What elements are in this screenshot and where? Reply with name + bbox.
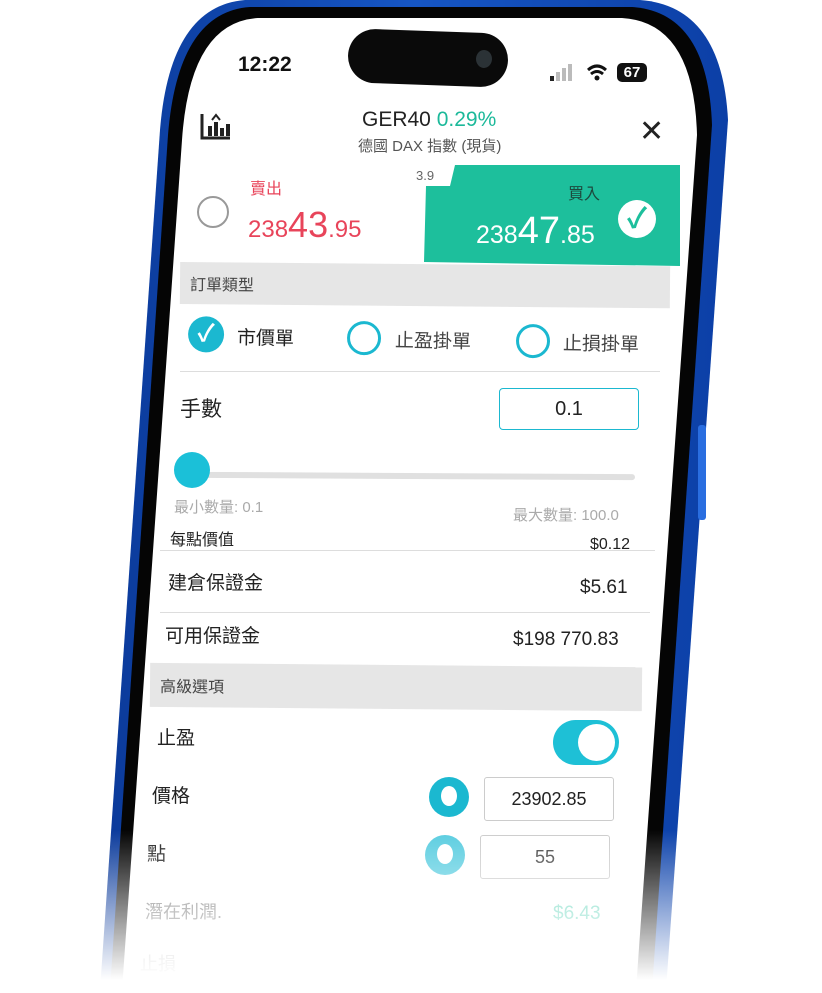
order type radios: 止損掛單 (563, 334, 639, 356)
status bar (238, 29, 647, 87)
min/max: $0.12 (590, 536, 630, 553)
order type radios: 市價單 (237, 328, 294, 350)
dynamic island (347, 28, 509, 88)
take profit: 價格 (152, 786, 190, 807)
band: order type: 訂單類型 (190, 277, 254, 295)
potential profit: $6.43 (553, 903, 601, 924)
min/max (170, 499, 630, 553)
band: advanced: 高級選項 (160, 679, 224, 696)
min/max: 最大數量: 100.0 (513, 507, 619, 524)
status bar: 12:22 (238, 53, 292, 76)
header: ✕ (639, 115, 664, 148)
potential profit: 潛在利潤. (145, 902, 222, 922)
potential profit (140, 902, 601, 974)
take profit: 23902.85 (511, 789, 587, 809)
lots: 0.1 (555, 398, 583, 420)
margin rows: $198 770.83 (513, 629, 619, 650)
status bar: 67 (624, 64, 640, 81)
order type radios: ✓ (197, 320, 215, 348)
bottom fade (0, 830, 822, 993)
signal/wifi/battery (550, 64, 607, 81)
min/max: 每點價值 (170, 532, 234, 549)
header: 德國 DAX 指數 (現貨) (358, 138, 501, 155)
sell / buy row: 3.9 (416, 168, 434, 183)
potential profit: 止損 (140, 954, 176, 974)
take profit: 點 (147, 844, 166, 865)
min/max: 最小數量: 0.1 (174, 499, 263, 516)
lots: 手數 (180, 398, 222, 421)
sell / buy row: 23847.85 (476, 210, 595, 252)
take profit (147, 720, 619, 879)
sell / buy row (197, 165, 680, 266)
header: GER40 0.29% (362, 108, 496, 131)
margin rows: 建倉保證金 (168, 573, 263, 594)
header (200, 108, 664, 155)
margin rows (165, 572, 628, 650)
sell / buy row: ✓ (627, 203, 647, 234)
lots (174, 388, 639, 488)
band: advanced (150, 663, 642, 711)
margin rows: $5.61 (580, 577, 628, 598)
order type radios (188, 316, 639, 358)
sell / buy row: 買入 (568, 186, 600, 203)
sell / buy row: 賣出 (250, 181, 282, 198)
order type radios: 止盈掛單 (395, 331, 471, 353)
take profit: 55 (535, 847, 555, 867)
sell / buy row: 23843.95 (248, 204, 361, 245)
take profit: 止盈 (157, 728, 195, 749)
band: order type (180, 262, 670, 308)
margin rows: 可用保證金 (165, 626, 260, 647)
